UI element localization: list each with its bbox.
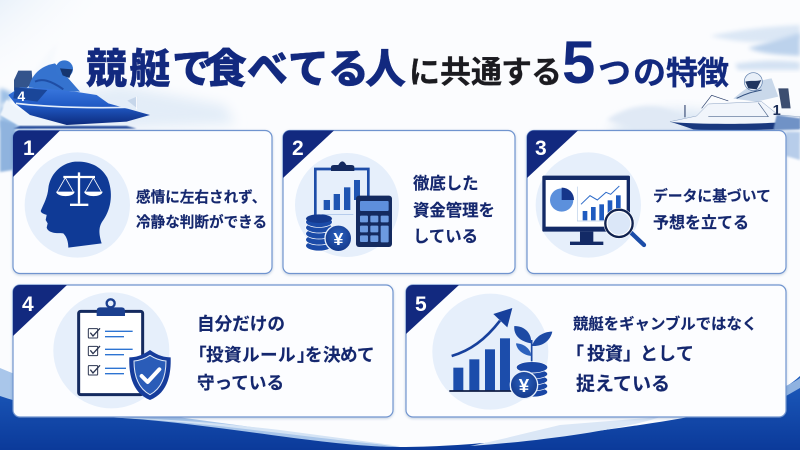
panel 4 <box>13 285 393 417</box>
icon: clipboard, calculator and coins: ¥ <box>333 229 343 249</box>
text 3: 予想を立てる <box>653 214 749 232</box>
panel 5 <box>406 285 786 417</box>
title: つの <box>598 54 666 91</box>
number badge 5 <box>406 285 459 334</box>
title: 5 <box>562 29 595 96</box>
title: 競艇で食べてる人 <box>86 46 406 92</box>
text 2 <box>413 175 495 246</box>
boat 4 (left) <box>0 60 150 129</box>
text 1 <box>136 188 267 231</box>
number badge 2 <box>283 130 334 178</box>
number badge 1: 1 <box>23 137 35 160</box>
panel 2 <box>283 130 515 274</box>
text 5: 捉えている <box>576 373 670 395</box>
text 4: 守っている <box>197 373 284 393</box>
title: に共通する <box>409 55 562 90</box>
text 4: 自分だけの <box>197 314 285 334</box>
boat 1 (right): 1 <box>773 103 781 119</box>
text 3: データに基づいて <box>653 187 771 205</box>
text 2: 資金管理を <box>413 201 495 220</box>
title: 特徴 <box>666 55 729 91</box>
icon: head with scales <box>25 152 130 258</box>
icon: growth chart with plant and coins: ¥ <box>519 375 530 396</box>
icon: monitor with charts and magnifier <box>536 152 644 258</box>
text 2: している <box>413 228 478 246</box>
number badge 4: 4 <box>22 293 34 316</box>
icon: checklist clipboard and shield <box>53 292 171 408</box>
number badge 3: 3 <box>535 137 547 160</box>
number badge 1 <box>13 130 60 177</box>
bottom wave <box>0 368 800 450</box>
text 5: 「投資」として <box>566 344 694 364</box>
panel 3 <box>527 130 786 274</box>
number badge 2: 2 <box>292 137 304 160</box>
icon: growth chart with plant and coins <box>432 294 552 410</box>
boat 1 (right) <box>607 73 800 132</box>
text 1: 感情に左右されず、 <box>136 188 266 206</box>
text 1: 冷静な判断ができる <box>136 213 267 231</box>
text 2: 徹底した <box>413 175 479 193</box>
text 5: 競艇をギャンブルではなく <box>573 314 757 333</box>
text 5 <box>566 314 757 395</box>
text 4 <box>189 314 375 393</box>
number badge 4 <box>13 285 67 336</box>
text 3 <box>653 187 771 232</box>
boat 4 (left): 4 <box>17 88 25 104</box>
panel 1 <box>13 130 272 274</box>
title <box>86 29 729 96</box>
number badge 5: 5 <box>415 293 427 316</box>
text 4: 「投資ルール」を決めて <box>189 345 375 365</box>
icon: clipboard, calculator and coins <box>295 153 399 257</box>
number badge 3 <box>527 130 578 178</box>
